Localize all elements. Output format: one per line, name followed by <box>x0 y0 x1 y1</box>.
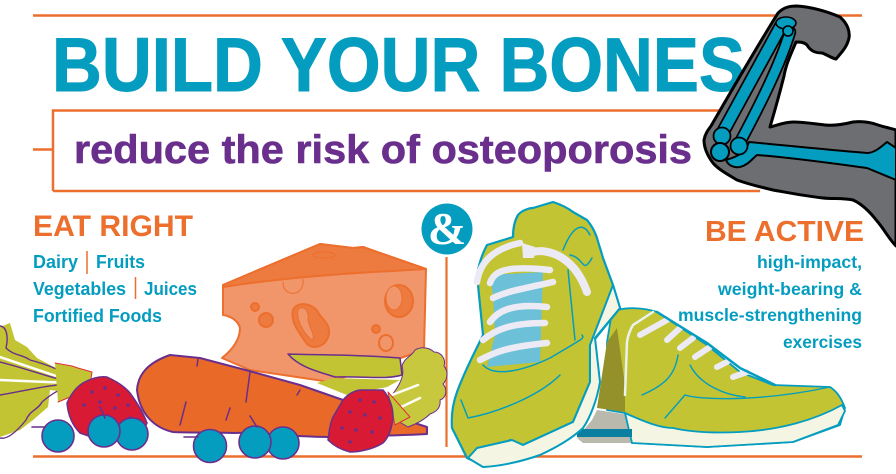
food list: Dairy <box>33 252 78 272</box>
cheese wedge <box>222 244 426 382</box>
icon: flexed arm with bones <box>704 6 896 246</box>
strawberry left <box>67 377 147 440</box>
ampersand badge: & <box>428 203 466 254</box>
pea pods <box>288 354 402 395</box>
shoe panel seams <box>461 227 592 418</box>
title: BUILD YOUR BONES <box>52 23 745 108</box>
strawberry right <box>328 390 410 452</box>
carrot <box>137 355 427 437</box>
heading: be active: BE ACTIVE <box>705 216 864 248</box>
laces <box>477 243 553 360</box>
sole <box>468 285 620 467</box>
panel: eat right text <box>33 210 197 326</box>
food list: Vegetables <box>33 279 126 299</box>
illustration: foods <box>0 244 447 462</box>
forearm bones <box>724 24 790 144</box>
upper arm bone <box>726 142 896 180</box>
panel: be active text <box>678 216 864 352</box>
illustration: sneakers <box>452 202 845 467</box>
exercise list: high-impact, <box>757 252 862 272</box>
heading: eat right: EAT RIGHT <box>33 210 193 243</box>
tongue <box>487 272 543 367</box>
subtitle: reduce the risk of osteoporosis <box>74 128 692 172</box>
heel shadow <box>597 328 625 412</box>
exercise list <box>678 252 862 352</box>
back shoe <box>577 308 845 447</box>
heel sole <box>577 410 632 443</box>
beet greens <box>0 323 92 438</box>
exercise list: weight-bearing & <box>717 279 862 299</box>
exercise list: muscle-strengthening <box>678 305 862 325</box>
food list: Juices <box>144 279 197 299</box>
subtitle box <box>33 110 760 191</box>
food list: Fortified Foods <box>33 306 162 326</box>
exercise list: exercises <box>783 332 862 352</box>
front shoe <box>452 202 620 467</box>
blueberries <box>32 407 299 462</box>
food list: Fruits <box>96 252 145 272</box>
food list <box>33 251 197 326</box>
greens bunch <box>392 348 447 427</box>
